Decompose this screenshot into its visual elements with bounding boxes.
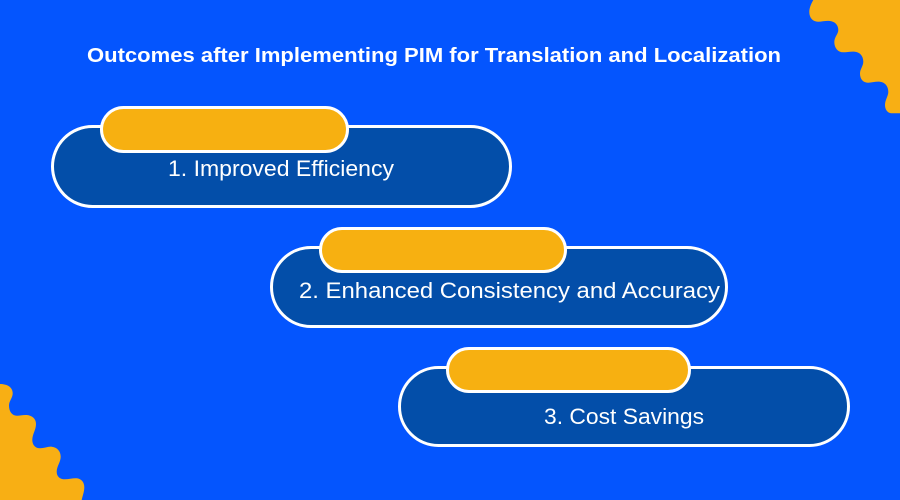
title: Outcomes after Implementing PIM for Translation and Localization <box>87 45 781 67</box>
item 3 yellow tab <box>448 348 690 392</box>
item 1 pill <box>52 126 510 206</box>
item 2 pill <box>272 248 726 326</box>
item 1 yellow tab <box>102 108 348 152</box>
item 3 pill <box>400 368 848 446</box>
item 1: Improved Efficiency <box>52 108 510 206</box>
item 2: Enhanced Consistency and Accuracy <box>272 228 726 326</box>
decorative wave: bottom left corner <box>0 384 84 500</box>
item 3: Cost Savings <box>400 348 848 446</box>
item 1 label: 1. Improved Efficiency <box>168 156 394 181</box>
decorative wave: top right corner <box>809 0 900 113</box>
item 3 label: 3. Cost Savings <box>544 404 704 429</box>
item 2 label: 2. Enhanced Consistency and Accuracy <box>299 278 720 303</box>
item 2 yellow tab <box>320 228 566 272</box>
